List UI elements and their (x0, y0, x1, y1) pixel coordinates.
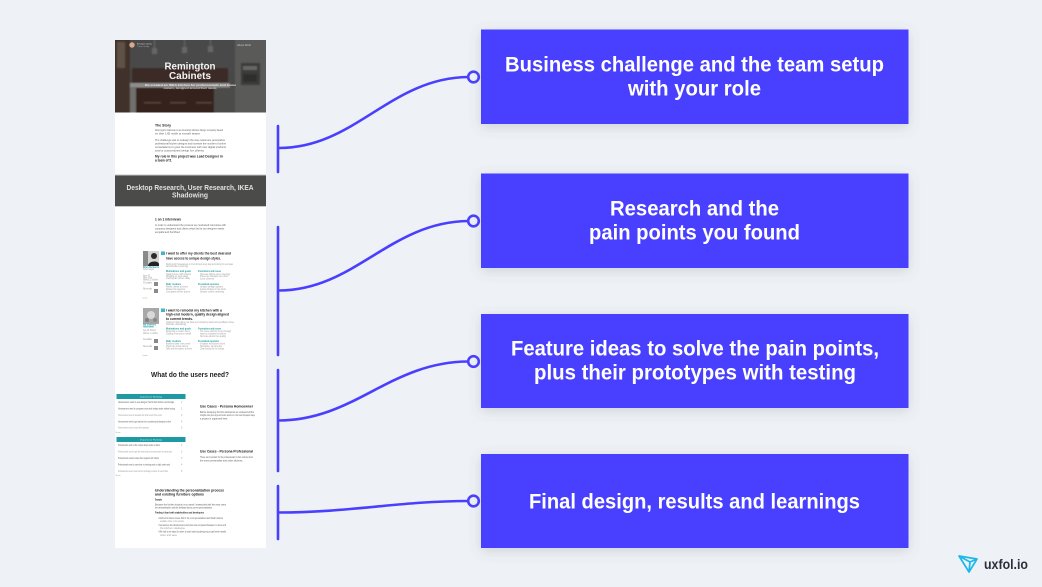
hero image with title: Re-created an IKEA kitchen for professionals and home (145, 83, 236, 87)
table: professional needs: Professionals need to save time in meetings and on daily order work (118, 462, 170, 466)
table: homeowner needs: Homeowners need to get advice from a professional designer online (118, 420, 171, 424)
text block: understanding personalization: order and save (160, 534, 178, 537)
persona card 2: to current trends. (166, 317, 193, 321)
persona card 1: Motivations and goals (166, 270, 192, 273)
persona card 2: high-end modern, quality design aligned (166, 312, 230, 316)
panel: final design: Final design, results and learnings (529, 490, 860, 514)
section band: research heading: Desktop Research, User Research, IKEA (126, 183, 254, 192)
persona card 2: Looking for help with a new home and comparing options across different stores (166, 321, 235, 324)
text block: understanding personalization: and existing furniture options (155, 492, 204, 496)
section band: research heading (115, 174, 266, 207)
hero image with title: Case study (137, 45, 149, 48)
persona card 2: Browses ideas every week (166, 342, 191, 346)
persona card 1: Frustrations and issues (198, 270, 221, 273)
persona card 1: New York (143, 276, 153, 280)
text block: use cases professional: the users personalize and order kitchens. (200, 458, 243, 462)
panel: business challenge: with your role (627, 76, 761, 100)
table: homeowner needs: Homeowners need to visualize the final result of the room (118, 414, 162, 417)
persona card 1: I want to offer my clients the best deal and (166, 252, 232, 256)
table: homeowner needs: Importance Ranking (140, 396, 163, 398)
text block: understanding personalization: Example (155, 498, 162, 502)
persona card 2: Hard to compare the prices (200, 332, 227, 336)
text block: understanding personalization: • Sometimes the development and price are compared between in-store and (158, 523, 226, 527)
table: homeowner needs: 3 (181, 414, 183, 417)
persona card 1: Prices are changing very often (200, 275, 229, 278)
persona card 2: Too many options to go through (200, 330, 232, 333)
persona card 2: Visualize the kitchen online (200, 342, 226, 346)
persona card 2: Not sure about the quality (200, 335, 227, 338)
table: homeowner needs: Homeowners need to compare prices and design styles before buying (118, 406, 175, 410)
persona photo 1 (143, 251, 159, 266)
text block: the story: The challenge was to redesign the way customers personalize (155, 138, 226, 142)
section band: research heading: Shadowing (172, 190, 208, 200)
text block: understanding personalization: the personalization and the feedback about current personalization (155, 506, 212, 510)
panel: feature ideas: Feature ideas to solve the pain points, (511, 336, 879, 360)
persona card 2: Designing a modern home (166, 330, 191, 333)
persona card 2: Homeowner (143, 326, 154, 328)
text block: the story: and a customized setup for clients (155, 148, 205, 152)
connector 3: bracket to feature ideas (278, 356, 479, 471)
persona card 2: Goals (143, 338, 153, 341)
table: homeowner needs: Share (116, 432, 121, 434)
persona card 1: Tools are hard to use in meetings (200, 273, 231, 276)
persona card 1: Working on new ideas (166, 275, 189, 278)
persona card 1: Quote (142, 296, 148, 300)
table: homeowner needs: 1 (181, 401, 183, 404)
icon: paper plane (959, 556, 977, 572)
table: professional needs: Professionals need to share their projects with clients (118, 456, 159, 460)
text block: the story: professional kitchen designs and increase the number of online (155, 142, 227, 146)
persona card 1 (142, 251, 234, 300)
hero image with title: Remington (164, 61, 216, 73)
persona card 1: have access to unique design styles. (166, 256, 221, 260)
persona card 1: Daily routines (166, 283, 182, 286)
text block: use cases homeowner: insights into journeys and main actions in the most frequent ways (200, 413, 256, 417)
hero image with title: About Work (237, 44, 252, 47)
persona card 2: Needs (143, 345, 153, 348)
table: professional needs: Professionals need to offer unique design styles to clients (118, 443, 160, 447)
persona card 1: Married, 2 children (143, 278, 158, 282)
persona card 1: Getting fair prices daily (166, 277, 191, 280)
connector 1: bracket to business challenge (278, 72, 479, 172)
quote icon (161, 308, 165, 312)
persona card 1: Custom kitchens for her clients (200, 288, 227, 291)
table: professional needs (116, 437, 186, 477)
text block: the story (155, 124, 227, 162)
text block: understanding personalization: the kitchen catalogue (160, 527, 186, 530)
persona card 2: before deciding (166, 323, 187, 326)
persona card 1: Compares all the prices (166, 290, 191, 294)
persona card 2: Simple process (200, 345, 223, 348)
text block: understanding personalization (155, 488, 227, 537)
text block: the story: a team of 5. (155, 158, 172, 162)
quote icon (161, 252, 165, 255)
persona card 1: Working with homeowners on their kitchens every day and looking for new ideas (166, 263, 234, 266)
table: professional needs: 2 (181, 450, 183, 454)
table: homeowner needs: Homeowners need to see designs that fit their kitchen and budget (118, 400, 174, 404)
persona card 2: Clear pricing for the design (200, 348, 225, 350)
text block: use cases homeowner: Before designing the first wireframes we reviewed all the (200, 410, 254, 414)
connector 2: bracket to research (278, 216, 479, 355)
persona card 2: Age 38, Boston (143, 329, 157, 332)
persona card 2 (142, 308, 235, 357)
persona card 1: Needs (143, 288, 153, 290)
text block: use cases homeowner: Use Cases - Persona Homeowner (200, 404, 254, 408)
text block: the story: My role in this project was Lead Designer in (155, 154, 224, 158)
text block: use cases homeowner (200, 404, 256, 420)
persona card 1: Saving time with clients (166, 273, 192, 276)
persona photo 2 (143, 308, 159, 324)
hero image with title (113, 38, 268, 114)
text block: interviews: 1 on 1 interviews (155, 218, 181, 222)
persona card 1: Simple online ordering (200, 290, 225, 294)
text block: understanding personalization: Understanding the personalization process (155, 488, 224, 492)
text block: the story: in the US with a small team (155, 132, 200, 136)
table: homeowner needs: 5 (181, 426, 183, 430)
panel: final design (481, 454, 908, 548)
logo: uxfol.io: uxfol.io (984, 557, 1028, 572)
persona card 2: Frustrations and issues (198, 328, 221, 330)
table: professional needs: Share (116, 475, 121, 477)
connector 4: bracket to final design (278, 486, 479, 539)
panel: research and pain points: pain points you found (589, 220, 800, 244)
table: professional needs: 3 (181, 457, 183, 460)
panel: research and pain points (481, 174, 908, 268)
persona card 1: Kitchen designer (143, 268, 154, 271)
panel: portfolio page thumbnail (113, 38, 268, 548)
panel: business challenge (481, 30, 908, 124)
hero image with title: Cabinets (169, 70, 211, 82)
panel: feature ideas (481, 314, 908, 408)
text block: use cases professional: Use Cases - Persona Professional (200, 450, 253, 454)
text block: interviews: company designers and clients which led to two designer needs (155, 226, 225, 230)
persona card 2: Quote (142, 354, 148, 357)
text block: the story: consultations to grow the business with new digital products (155, 145, 227, 149)
table: homeowner needs: 2 (181, 408, 183, 410)
persona card 1: Draws the layouts (166, 288, 186, 291)
persona card 1: Meets clients at home (166, 286, 189, 288)
text block: use cases professional: These are important for the professionals in their actions when (200, 455, 253, 459)
persona card 1: Age 42 (143, 274, 151, 278)
table: professional needs: Importance Ranking (140, 438, 163, 442)
text block: the story: Remington Cabinets is an American kitchen design company based (155, 128, 223, 132)
table: professional needs: Professionals need to get the best deal and a clear price for each style (118, 450, 172, 454)
persona card 2: Talks with the partner at home (166, 348, 193, 350)
text block: interviews: explored further (155, 230, 180, 234)
heading: what do the users need: What do the users need? (151, 370, 229, 379)
table: homeowner needs (116, 394, 186, 434)
table: professional needs: 1 (181, 444, 183, 447)
table: professional needs: 4 (181, 464, 183, 466)
hero image with title: Remington Cabinets (137, 42, 153, 46)
table: professional needs: 5 (181, 470, 183, 473)
persona card 1: Goals (143, 282, 153, 284)
persona card 1: Unique design options (200, 286, 224, 288)
text block: interviews: In order to understand the process we conducted interviews with (155, 223, 227, 227)
text block: the story: The Story (155, 124, 171, 128)
persona card 2: Motivations and goals (166, 328, 192, 330)
persona card 2: Pat Simmons (143, 324, 156, 326)
table: homeowner needs: Homeowners need to save their projects (118, 426, 150, 430)
text block: use cases professional (200, 450, 253, 462)
panel: feature ideas: plus their prototypes with testing (534, 360, 856, 384)
logo: uxfol.io (959, 556, 1028, 572)
text block: understanding personalization: • We built to be easy for users to start exploring designing to get better results (158, 530, 227, 534)
persona card 2: Personalized experience (198, 340, 219, 343)
hero image with title: owners, designed around their needs (164, 86, 217, 90)
persona card 1: Ellen Richards (143, 266, 160, 269)
table: homeowner needs: 4 (181, 420, 183, 424)
panel: research and pain points: Research and the (610, 196, 779, 220)
persona card 2: Visits the local stores (166, 345, 189, 348)
text block: understanding personalization: available online on the website (160, 520, 184, 523)
panel: business challenge: Business challenge and the team setup (505, 52, 884, 76)
text block: interviews (155, 218, 227, 234)
text block: use cases homeowner: a project is organized here. (200, 416, 228, 420)
persona card 1: Personalized experience (198, 283, 219, 286)
persona card 2: I want to remodel my kitchen with a (166, 308, 223, 312)
persona card 2: Married, no children (143, 332, 158, 335)
table: professional needs: Professionals need to keep track of all design versions for each client (118, 470, 168, 473)
persona card 1: and better pricing (166, 265, 189, 268)
persona card 1: Lost clients (200, 278, 215, 280)
persona card 2: Getting a fair price overall (166, 332, 191, 336)
text block: understanding personalization: • Kitchen furniture comes first in the most personalized and fitted furniture (158, 516, 223, 520)
text block: understanding personalization: Finding it hard with stakeholders and developers (155, 512, 205, 514)
persona card 2: Daily routines (166, 340, 182, 343)
text block: understanding personalization: Because the kitchen industry is so varied I researched with the main users (155, 502, 227, 506)
